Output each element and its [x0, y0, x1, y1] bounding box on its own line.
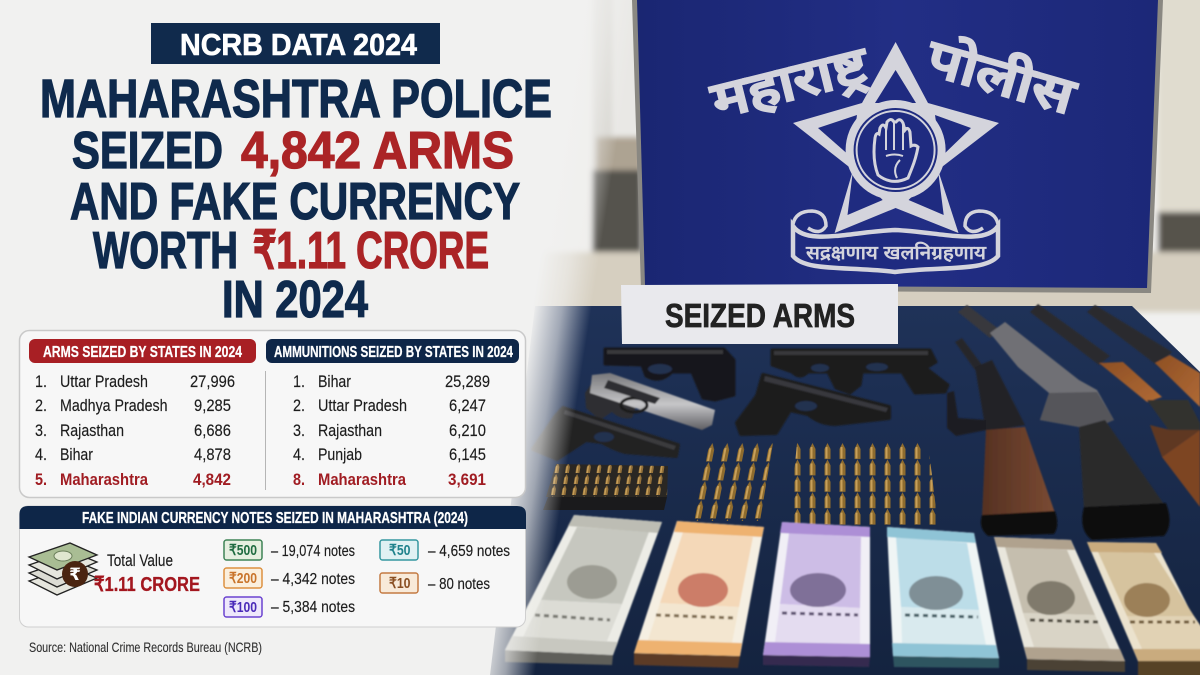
table: ammunitions seized: Uttar Pradesh [318, 396, 407, 415]
table: arms seized: 4. [35, 445, 47, 464]
table: ammunitions seized: Bihar [318, 372, 351, 391]
table: ammunitions seized: 4. [293, 445, 305, 464]
pistol: top right pair [772, 350, 948, 393]
total value [94, 551, 200, 596]
table: ammunitions seized: 3. [293, 421, 305, 440]
pistol: silver [585, 373, 715, 430]
denomination: 200 [224, 568, 355, 588]
denomination: 10: ₹10 [389, 575, 410, 592]
headline: MAHARASHTRA POLICE [40, 69, 552, 129]
denomination: 50: ₹50 [389, 542, 410, 559]
denomination: 50 [380, 540, 510, 560]
denomination: 500 [224, 540, 355, 560]
heading: fake currency [20, 506, 526, 529]
table: ammunitions seized [293, 372, 490, 489]
denomination: 10 [380, 573, 490, 593]
emblem: star [793, 42, 999, 233]
headline: 4,842 ARMS [241, 122, 514, 180]
denomination: 200: ₹200 [229, 570, 257, 587]
panel: fake currency notes [20, 506, 526, 627]
table: ammunitions seized: 6,145 [449, 445, 486, 464]
table: ammunitions seized: 1. [293, 372, 305, 391]
headline: AND FAKE CURRENCY [70, 173, 520, 231]
photo: pistols [533, 349, 948, 459]
ammo tray [543, 464, 668, 510]
notes: tan stack [1087, 542, 1200, 675]
notes: orange stack [634, 521, 764, 668]
table: ammunitions seized: 3,691 [448, 470, 486, 489]
table: arms seized: 4,878 [194, 445, 231, 464]
emblem: Devanagari arc right: पोलीस [920, 28, 1084, 125]
photo: currency note stacks [505, 515, 1200, 675]
rifle: wood stock 4 [1087, 305, 1200, 407]
bullets: middle group [690, 443, 773, 521]
photo: blue display mat [490, 306, 1200, 675]
notes: purple stack [763, 522, 870, 667]
headline [40, 69, 552, 329]
table: arms seized [35, 372, 235, 489]
table: ammunitions seized: 6,247 [449, 396, 486, 415]
photo: rifles [947, 304, 1200, 540]
photo: ammunition [543, 443, 938, 525]
label: NCRB data 2024: NCRB DATA 2024 [180, 27, 418, 62]
table: ammunitions seized: 25,289 [445, 372, 490, 391]
notes: taupe stack [994, 537, 1125, 672]
table: arms seized: 27,996 [190, 372, 235, 391]
table: arms seized: 9,285 [194, 396, 231, 415]
heading: arms seized [29, 339, 256, 363]
table: arms seized: 1. [35, 372, 47, 391]
table: arms seized: Uttar Pradesh [60, 372, 148, 391]
icon: stack of money with rupee coin: ₹ [69, 565, 81, 584]
table: arms seized: Rajasthan [60, 421, 124, 440]
table: ammunitions seized: Rajasthan [318, 421, 382, 440]
rifle: wood stock 3 [1030, 304, 1200, 507]
icon: stack of money with rupee coin [29, 543, 97, 595]
heading: ammunitions seized [266, 339, 519, 363]
rifle: brown stock AK [947, 338, 1057, 536]
table: arms seized: 4,842 [193, 470, 231, 489]
emblem: ribbon with motto [793, 211, 998, 272]
table: ammunitions seized: 2. [293, 396, 305, 415]
table: arms seized: 6,686 [194, 421, 231, 440]
seized arms placard [621, 284, 898, 344]
heading: fake currency: FAKE INDIAN CURRENCY NOTES SEIZED IN MAHARASHTRA (2024) [82, 510, 468, 527]
denomination: 500: – 19,074 notes [271, 543, 355, 560]
denomination: 100: ₹100 [229, 599, 257, 616]
source note: Source: National Crime Records Bureau (NCRB) [29, 639, 262, 655]
seized arms placard: SEIZED ARMS [665, 297, 855, 334]
emblem: Devanagari arc left: महाराष्ट्र [705, 36, 875, 130]
total value: ₹1.11 CRORE [94, 573, 200, 596]
denomination: 50: – 4,659 notes [428, 543, 510, 560]
denomination: 100 [224, 597, 355, 617]
headline: WORTH [93, 222, 238, 280]
table: arms seized: Maharashtra [60, 470, 148, 489]
table: arms seized: Bihar [60, 445, 93, 464]
total value: Total Value [107, 551, 173, 570]
pistol: centre dark [737, 375, 889, 434]
pistol: top left [605, 349, 734, 400]
denomination: 10: – 80 notes [428, 576, 490, 593]
denomination: 500: ₹500 [229, 542, 257, 559]
table: arms seized: 5. [35, 470, 47, 489]
table: arms seized: Madhya Pradesh [60, 396, 168, 415]
pistol: lower left [533, 408, 678, 459]
heading: arms seized: ARMS SEIZED BY STATES IN 2024 [43, 344, 242, 361]
notes: teal stack [887, 527, 999, 668]
notes: grey stack [505, 515, 662, 665]
emblem: ribbon with motto: सद्रक्षणाय खलनिग्रहणाय [805, 241, 987, 264]
panel: state rankings [20, 330, 526, 498]
headline: IN 2024 [222, 271, 368, 329]
police sign board [632, 0, 1163, 293]
headline: ₹1.11 CRORE [253, 222, 489, 280]
heading: ammunitions seized: AMMUNITIONS SEIZED BY STATES IN 2024 [274, 344, 513, 361]
bullets: right group [789, 443, 938, 525]
table: arms seized: 3. [35, 421, 47, 440]
denomination: 200: – 4,342 notes [271, 571, 355, 588]
rifle: grey stock [958, 305, 1170, 540]
table: ammunitions seized: Punjab [318, 445, 362, 464]
emblem: raised hand [874, 120, 918, 181]
photo: wall and table [500, 0, 1200, 312]
headline: SEIZED [72, 122, 223, 180]
table: ammunitions seized: 6,210 [449, 421, 486, 440]
table: ammunitions seized: 8. [293, 470, 305, 489]
table: ammunitions seized: Maharashtra [318, 470, 406, 489]
table: arms seized: 2. [35, 396, 47, 415]
denomination: 100: – 5,384 notes [271, 599, 355, 616]
